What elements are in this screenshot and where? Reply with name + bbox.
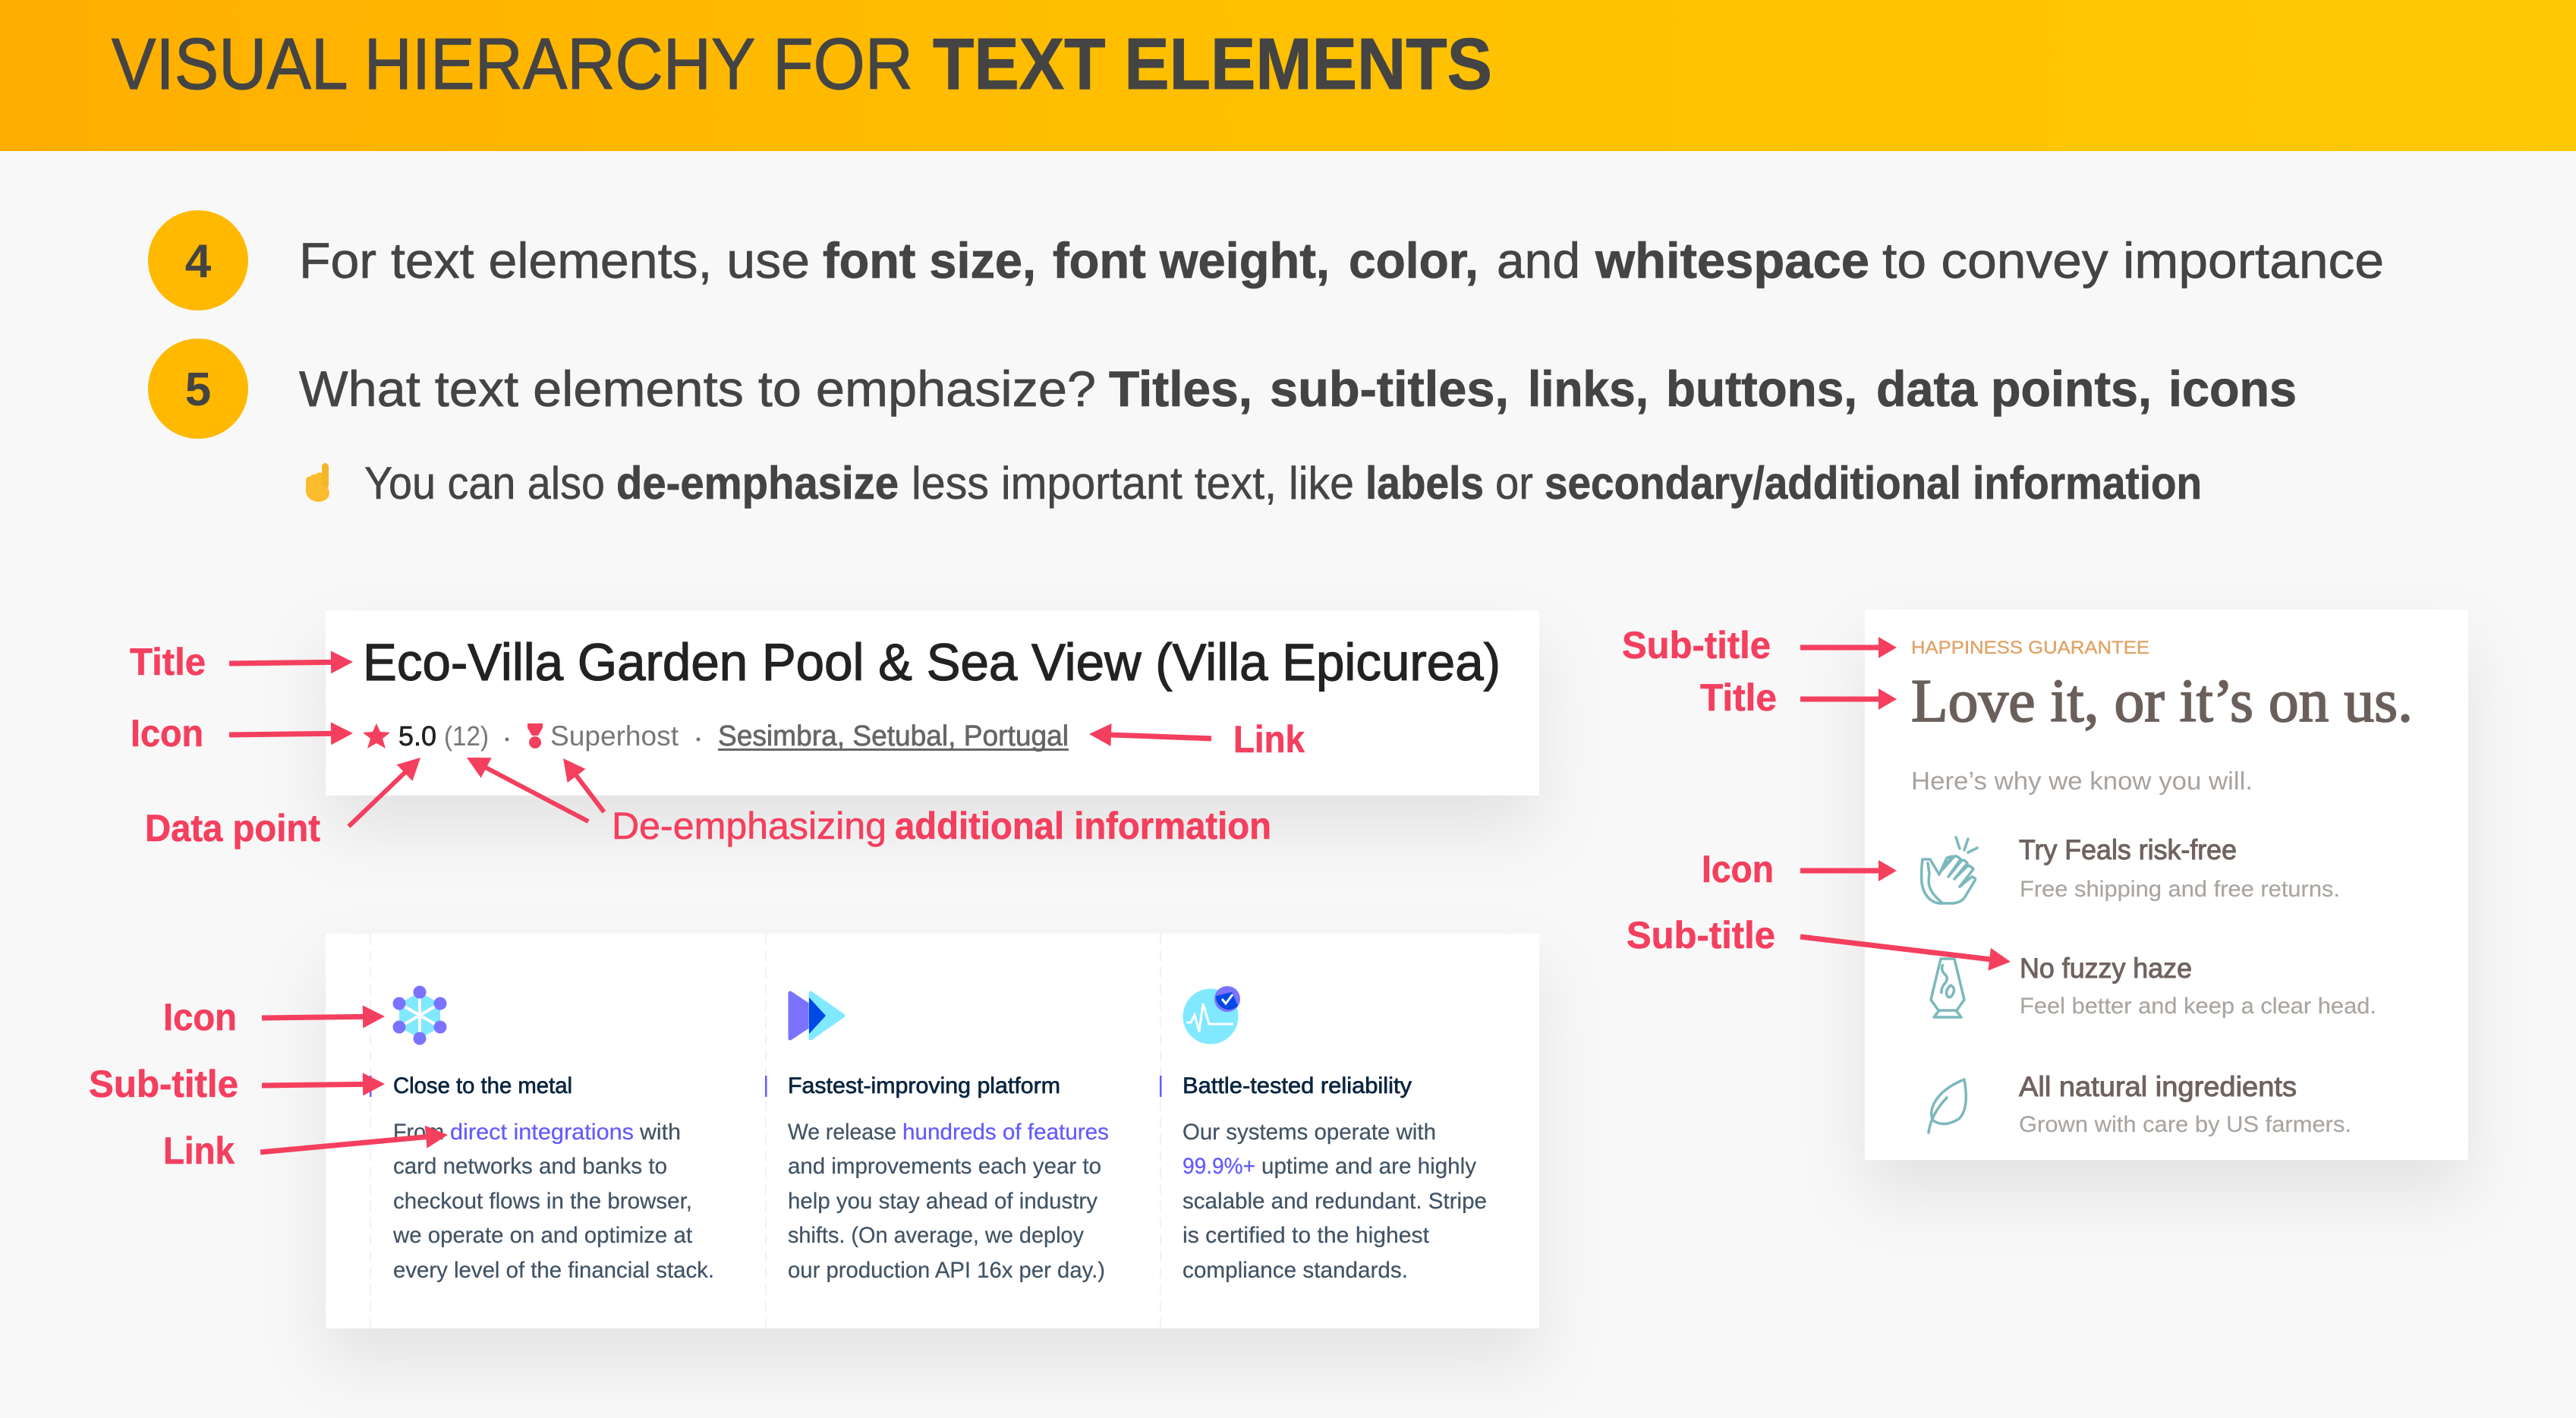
label: Link: Link	[163, 1130, 235, 1172]
column 3 body: 99.9%+	[1183, 1154, 1255, 1179]
column 1 body	[392, 1120, 714, 1283]
de-emphasize note	[364, 458, 2202, 509]
column 2 body: hundreds of features	[902, 1120, 1109, 1145]
guarantee intro: Here’s why we know you will.	[1911, 767, 2253, 795]
separator dot	[697, 738, 700, 741]
column 3 body: scalable and redundant. Stripe	[1183, 1189, 1487, 1214]
column 3 sub-title: Battle-tested reliability	[1183, 1073, 1412, 1098]
arrow: title	[1800, 689, 1897, 710]
icon: leaf	[1929, 1079, 1966, 1133]
point 4 text: whitespace	[1595, 232, 1869, 288]
column 3 body	[1183, 1120, 1487, 1283]
label: Sub-title: Sub-title	[1622, 624, 1771, 666]
icon: clapping hands	[1922, 837, 1977, 903]
arrow: data point	[341, 749, 428, 834]
arrow: link	[260, 1123, 449, 1164]
column 1 sub-title: Close to the metal	[393, 1073, 572, 1098]
column 3 body: uptime and are highly	[1261, 1154, 1476, 1179]
point 5 text: Titles,	[1109, 361, 1252, 417]
header banner	[0, 0, 2576, 151]
column 2 sub-title: Fastest-improving platform	[788, 1073, 1060, 1098]
column 2 body: our production API 16x per day.)	[788, 1258, 1105, 1283]
de-emphasize note: de-emphasize	[616, 458, 899, 509]
column 1 body: we operate on and optimize at	[392, 1223, 693, 1248]
label: Title: Title	[1700, 676, 1777, 719]
benefit 3 description: Grown with care by US farmers.	[2019, 1112, 2351, 1137]
label: de-emphasizing: De-emphasizing	[612, 805, 886, 847]
point 5 text: buttons,	[1666, 361, 1857, 417]
label: Icon: Icon	[131, 712, 203, 755]
arrow: icon	[229, 722, 353, 746]
arrow: link	[1088, 723, 1211, 750]
review count: (12)	[444, 720, 489, 752]
benefit 1 description: Free shipping and free returns.	[2020, 877, 2340, 902]
benefit 1 sub-title: Try Feals risk-free	[2019, 834, 2237, 865]
column 2 body: and improvements each year to	[788, 1154, 1101, 1179]
point 4 text	[299, 232, 2384, 288]
title: TEXT ELEMENTS	[933, 24, 1492, 105]
listing title: Eco-Villa Garden Pool & Sea View (Villa Epicurea)	[363, 633, 1501, 692]
point 5 number badge: 5	[185, 364, 211, 416]
de-emphasize note: less important text, like	[912, 458, 1354, 509]
arrow: sub-title	[262, 1073, 385, 1097]
point 4 text: For text elements, use	[299, 232, 810, 288]
icon: star	[363, 723, 390, 748]
icon: network hexagon	[393, 985, 446, 1045]
arrow: icon	[1800, 860, 1897, 881]
point 5 text: links,	[1528, 361, 1649, 417]
point 5 text: icons	[2168, 361, 2297, 417]
eyebrow sub-title: HAPPINESS GUARANTEE	[1911, 638, 2149, 658]
point 5 number badge	[148, 339, 248, 439]
separator dot	[505, 738, 509, 741]
location link: Sesimbra, Setubal, Portugal	[718, 720, 1069, 752]
column dividers	[370, 934, 1160, 1328]
point 5 text: What text elements to emphasize?	[299, 361, 1096, 417]
arrow: superhost	[554, 752, 613, 819]
arrow: title	[229, 651, 353, 675]
column 3 body: is certified to the highest	[1183, 1223, 1430, 1248]
de-emphasize note: secondary/additional information	[1545, 458, 2202, 509]
label: Icon: Icon	[163, 996, 237, 1038]
title	[112, 24, 1492, 105]
label: Link: Link	[1233, 718, 1305, 761]
rating data point: 5.0	[398, 720, 436, 752]
point 4 text: font size,	[823, 232, 1036, 288]
point 4 text: to convey importance	[1882, 232, 2384, 288]
accent ticks	[370, 1076, 1161, 1097]
arrow: sub-title	[1799, 925, 2012, 973]
title: VISUAL HIERARCHY FOR	[112, 24, 913, 105]
label: de-emphasizing: additional information	[895, 805, 1271, 847]
label: Title: Title	[130, 641, 206, 683]
panel: listing example	[326, 610, 1539, 796]
column 2 body: help you stay ahead of industry	[788, 1189, 1097, 1214]
guarantee title: Love it, or it’s on us.	[1911, 668, 2413, 735]
label: Sub-title: Sub-title	[1627, 914, 1775, 956]
column 3 body: compliance standards.	[1183, 1258, 1408, 1283]
column 2 body: shifts. (On average, we deploy	[788, 1223, 1084, 1248]
icon: uptime check	[1183, 986, 1240, 1045]
panel: three features	[326, 934, 1539, 1328]
column 1 body: checkout flows in the browser,	[393, 1189, 692, 1214]
column 1 body: every level of the financial stack.	[393, 1258, 714, 1283]
de-emphasize note: labels	[1365, 458, 1484, 509]
column 2 body: We release	[788, 1120, 896, 1145]
benefit 2 sub-title: No fuzzy haze	[2020, 953, 2192, 984]
arrow: sub-title	[1800, 637, 1897, 658]
column 1 body: with	[639, 1120, 681, 1145]
point 4 number badge	[148, 210, 248, 310]
panel: happiness guarantee	[1865, 610, 2468, 1160]
superhost label: Superhost	[550, 720, 679, 752]
label: de-emphasizing	[612, 805, 1271, 847]
label: Icon: Icon	[1702, 848, 1774, 890]
point 5 text	[299, 361, 2297, 417]
point 4 number badge: 4	[185, 235, 212, 288]
benefit 3 sub-title: All natural ingredients	[2019, 1071, 2297, 1102]
column 1 body: card networks and banks to	[393, 1154, 667, 1179]
icon: pointing finger	[306, 463, 329, 502]
label: Data point: Data point	[145, 807, 320, 849]
column 3 body: Our systems operate with	[1183, 1120, 1436, 1145]
point 4 text: color,	[1349, 232, 1479, 288]
point 5 text: data points,	[1876, 361, 2152, 417]
benefit 2 description: Feel better and keep a clear head.	[2020, 994, 2376, 1019]
column 1 body: direct integrations	[450, 1120, 634, 1145]
arrow: review count	[461, 748, 594, 831]
label: Sub-title: Sub-title	[89, 1063, 238, 1105]
icon: double chevron	[790, 993, 843, 1038]
icon: lava lamp	[1931, 959, 1964, 1017]
de-emphasize note: You can also	[364, 458, 605, 509]
column 2 body	[788, 1120, 1109, 1283]
point 4 text: font weight,	[1053, 232, 1330, 288]
column 1 body: From	[393, 1120, 444, 1145]
de-emphasize note: or	[1495, 458, 1533, 509]
point 4 text: and	[1497, 232, 1580, 288]
arrow: icon	[262, 1005, 385, 1029]
icon: superhost	[527, 723, 543, 748]
point 5 text: sub-titles,	[1270, 361, 1509, 417]
